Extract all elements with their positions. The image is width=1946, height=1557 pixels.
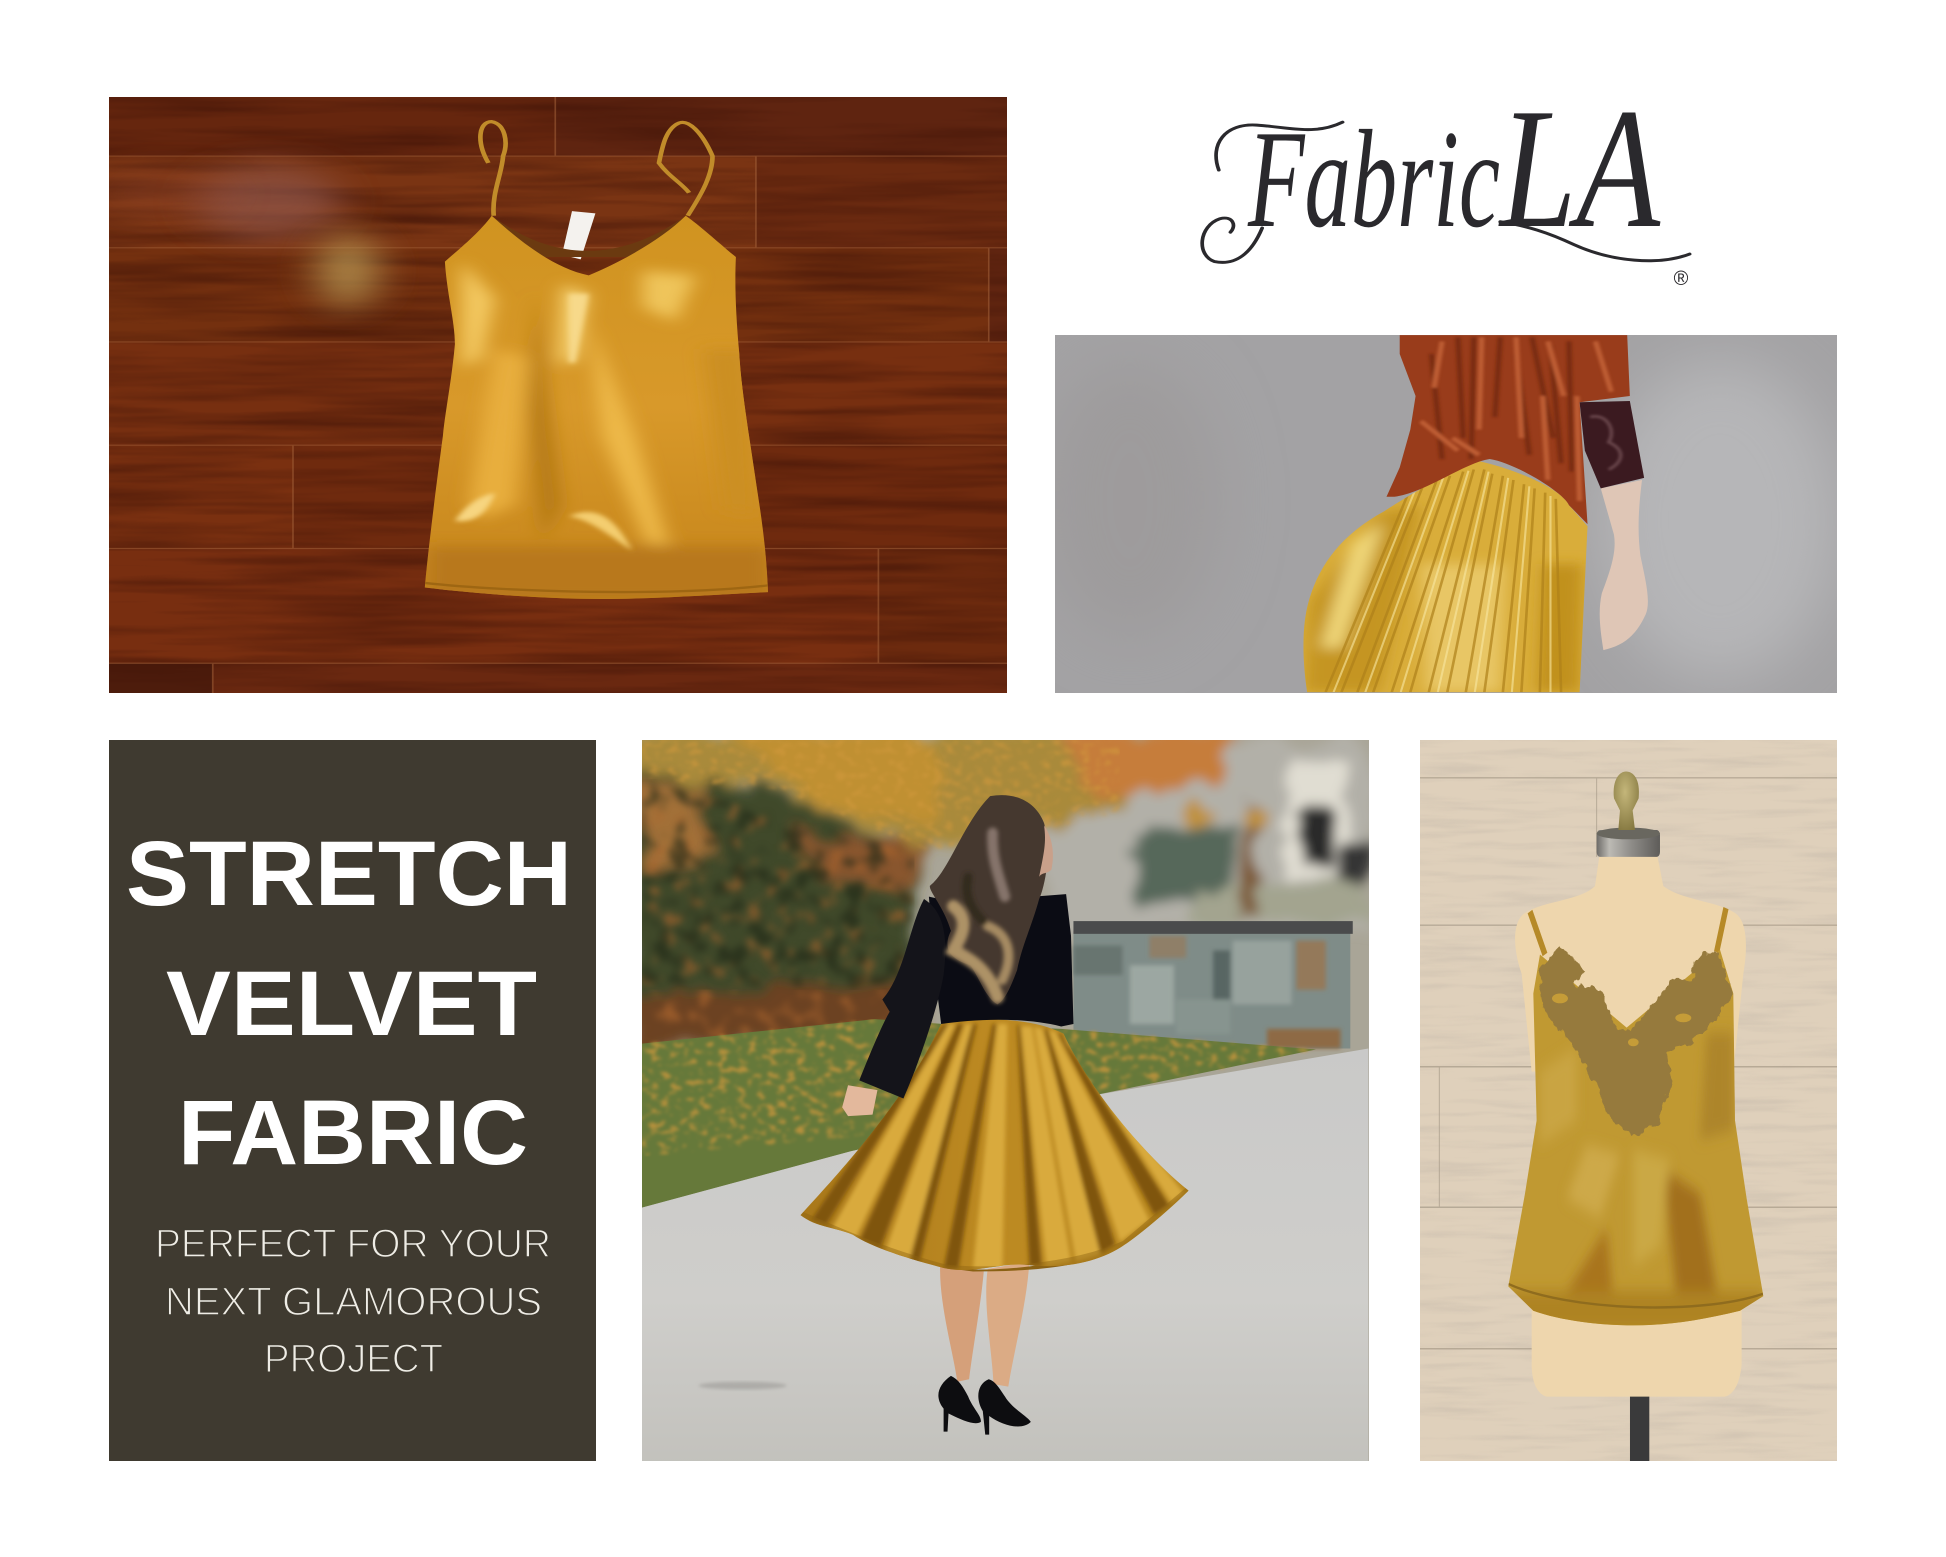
subheading: PROJECT [264, 1337, 443, 1381]
foliage dappling [642, 740, 1120, 1044]
rust crushed velvet blouse [1386, 335, 1630, 524]
sleeve highlights [1590, 416, 1621, 470]
blouse crushed streaks [1421, 337, 1611, 501]
dress form torso [1515, 852, 1746, 1072]
dress form stand pole [1630, 1394, 1649, 1467]
wall plank seams [1419, 778, 1837, 1349]
heading: STRETCH [126, 823, 572, 925]
hand [842, 1085, 877, 1116]
skirt underlayer [934, 1237, 1130, 1271]
back neckline [492, 216, 686, 257]
hair highlights and curls [953, 833, 1009, 997]
white-wash plank wall [1420, 740, 1837, 1461]
hang tag [562, 211, 595, 259]
brown hair [930, 795, 1048, 1004]
subheading [155, 1222, 551, 1381]
blurred autumn background [630, 730, 1370, 1048]
heading: VELVET [166, 953, 537, 1055]
floor glare [100, 165, 380, 308]
subheading: PERFECT FOR YOUR [155, 1222, 551, 1266]
logo: FabricLA [1202, 74, 1690, 290]
panel: stretch velvet fabric title [109, 740, 596, 1461]
black sleeve [859, 899, 945, 1098]
velvet shading [1508, 1033, 1763, 1330]
camisole folds [425, 262, 769, 601]
logo capitals LA: LA [1498, 74, 1661, 264]
logo wordmark: Fabric [1247, 102, 1500, 257]
paved path [642, 1048, 1368, 1467]
logo swashes [1202, 122, 1690, 262]
studio background [1055, 335, 1837, 693]
heading: FABRIC [178, 1082, 528, 1184]
plank seams [109, 96, 1009, 695]
panel: grey studio photo with pleated skirt [1040, 335, 1840, 693]
lace applique [1538, 947, 1733, 1137]
stone planter wall [1073, 931, 1350, 1048]
registered mark: ® [1674, 268, 1689, 290]
dark title background [109, 740, 596, 1461]
face [1039, 826, 1053, 877]
black blouse [929, 894, 1073, 1026]
panel: mannequin wearing gold velvet cami with lace [1419, 740, 1837, 1467]
grass and fallen leaves [642, 1019, 1316, 1208]
heading [126, 823, 572, 1184]
skirt pleats [801, 1024, 1189, 1270]
brass finial [1614, 771, 1639, 830]
panel: wood floor with satin camisole [100, 96, 1010, 695]
subheading: NEXT GLAMOROUS [165, 1280, 542, 1324]
wood grain texture [109, 97, 1007, 693]
lace cutouts [1552, 994, 1691, 1046]
wood planks [109, 96, 1010, 695]
panel: woman twirling in gold pleated velvet skirt [630, 730, 1370, 1467]
infographic collage [109, 97, 1837, 1461]
gold velvet pleated skirt [801, 1019, 1189, 1270]
dress form collar cap [1597, 830, 1660, 857]
skirt pleats [1304, 470, 1582, 692]
velvet leather sleeve [1580, 401, 1644, 488]
camisole body [425, 216, 768, 599]
gold velvet camisole [1508, 950, 1763, 1325]
top straps [1530, 908, 1726, 954]
camisole straps [480, 122, 712, 216]
high heels [938, 1376, 1031, 1435]
background light falloff [1600, 360, 1840, 680]
satin camisole [425, 122, 769, 601]
fallen leaves on grass [642, 1019, 1316, 1156]
model arm [1600, 480, 1648, 650]
pleated satin skirt [1303, 461, 1588, 692]
pavement shadows [699, 1382, 787, 1390]
legs [940, 1264, 984, 1382]
wood floor background [109, 97, 1007, 693]
